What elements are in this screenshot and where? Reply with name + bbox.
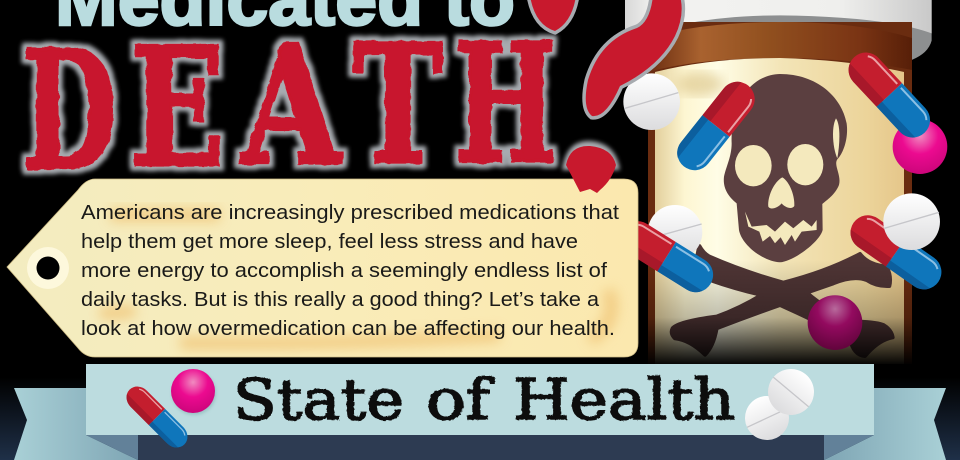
heading: State <box>233 368 404 433</box>
ribbon left fold <box>86 435 138 460</box>
tag stains <box>100 215 611 343</box>
prescription bottle <box>625 0 932 364</box>
banner pink ball <box>171 369 216 415</box>
tablet lower <box>738 389 796 447</box>
plum ball <box>808 295 862 350</box>
title line two: D <box>22 14 117 207</box>
bottle label <box>655 58 904 364</box>
panel below banner <box>138 435 824 460</box>
capsule mid left <box>614 215 720 299</box>
tablet upper <box>759 360 823 424</box>
bottle cap <box>625 0 932 72</box>
title line two: H <box>455 7 557 200</box>
pills on bottle <box>614 45 948 350</box>
title line two: E <box>130 11 225 204</box>
pink ball <box>893 119 947 174</box>
capsule top left <box>670 75 762 177</box>
question mark <box>530 0 682 116</box>
capsule top right <box>841 45 937 145</box>
label stain <box>676 72 724 96</box>
label bottom shadow <box>648 260 912 364</box>
tablet mid right <box>883 193 940 250</box>
intro text <box>81 201 619 340</box>
title line two <box>22 7 557 207</box>
title line two: A <box>239 9 343 202</box>
heading: of <box>426 368 495 433</box>
skull and crossbones <box>672 74 893 356</box>
heading: Health <box>513 368 735 433</box>
intro text: Americans are increasingly prescribed medications that <box>81 201 619 224</box>
tablet upper left <box>623 73 680 130</box>
intro text: look at how overmedication can be affecting our health. <box>81 317 615 340</box>
ribbon right tail <box>824 388 946 460</box>
capsule mid right <box>844 208 948 296</box>
crossbones <box>672 246 893 356</box>
intro tag <box>7 179 638 357</box>
tag hole <box>27 247 69 289</box>
skull <box>724 74 847 262</box>
intro text: help them get more sleep, feel less stress and have <box>81 230 578 253</box>
tag shape <box>7 179 638 357</box>
banner <box>86 364 874 435</box>
intro text: more energy to accomplish a seemingly endless list of <box>81 259 607 282</box>
ribbon left tail <box>14 388 138 460</box>
skull eyes <box>735 118 839 245</box>
bottle shoulder <box>648 22 912 72</box>
question mark glow <box>562 141 620 170</box>
tablet mid left <box>648 205 702 260</box>
intro text: daily tasks. But is this really a good thing? Let’s take a <box>81 288 600 311</box>
banner tablets <box>738 360 823 447</box>
bottle body <box>648 22 912 364</box>
heading <box>233 368 735 433</box>
question mark dot <box>566 146 616 193</box>
banner capsule <box>122 382 192 452</box>
title line two: T <box>353 8 443 201</box>
ribbon right fold <box>824 435 874 460</box>
